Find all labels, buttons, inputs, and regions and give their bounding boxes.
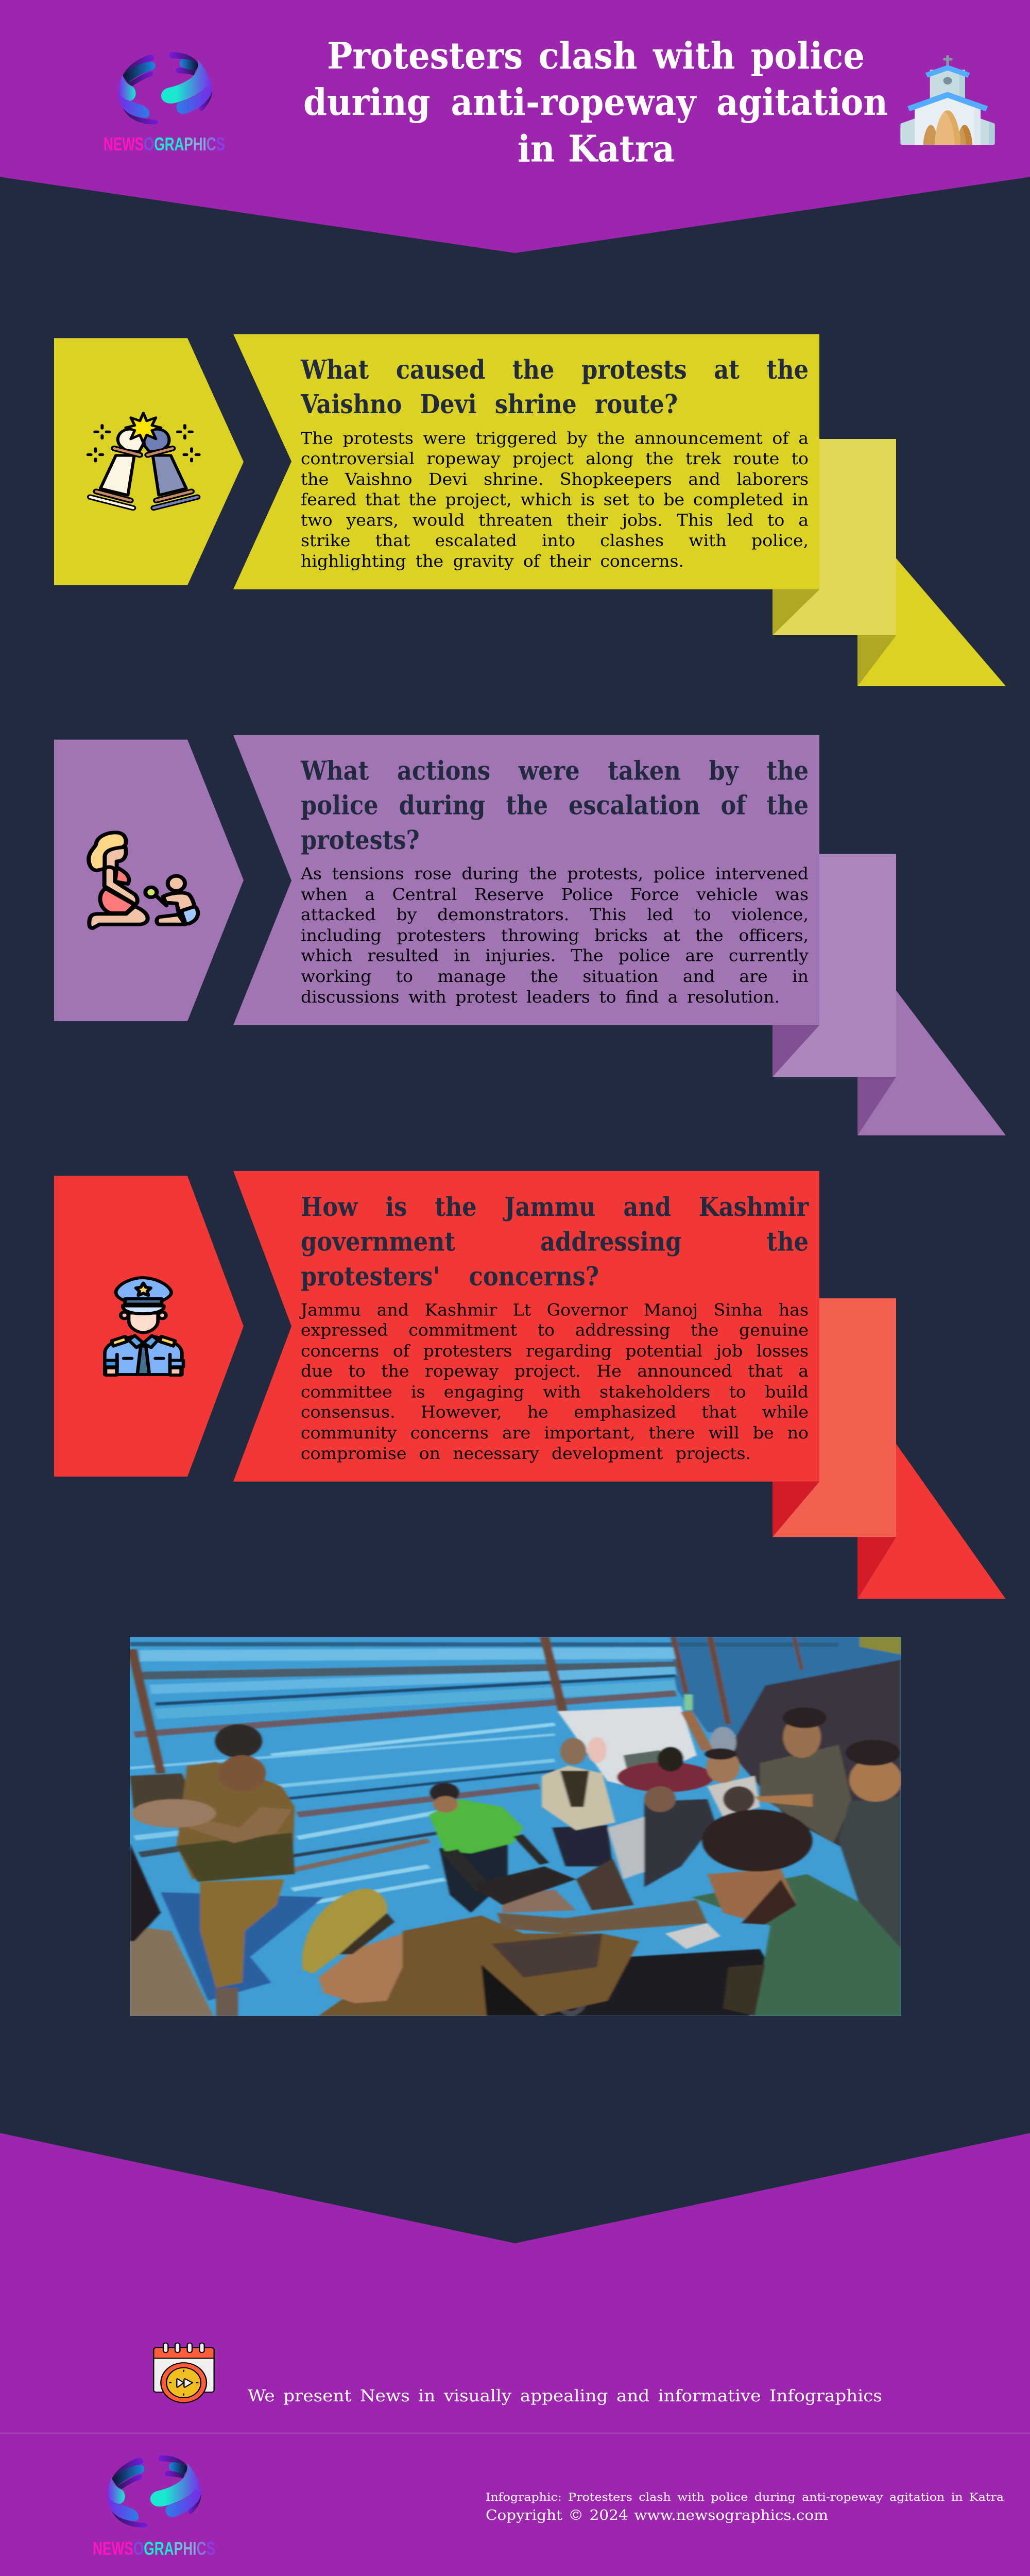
text banner — [233, 735, 819, 1025]
body text: compromise on necessary development projects. — [301, 1445, 751, 1463]
body text — [301, 865, 809, 1006]
front man — [692, 1874, 901, 2016]
old man — [552, 1825, 613, 1867]
green shirt man — [439, 1843, 508, 1913]
icon: mother and child — [89, 833, 198, 928]
heading: What caused the protests at the — [301, 354, 809, 385]
heading: What actions were taken by the — [301, 755, 809, 786]
body text: when a Central Reserve Police Force vehicle was — [301, 885, 809, 904]
body text: controversial ropeway project along the trek route to — [301, 450, 809, 468]
body text: working to manage the situation and are in — [301, 968, 809, 986]
body text: Jammu and Kashmir Lt Governor Manoj Sinha has — [301, 1301, 809, 1319]
heading: police during the escalation of the — [301, 790, 809, 821]
card tail — [857, 558, 1006, 686]
footer credit text — [486, 2490, 1004, 2523]
body text: which resulted in injuries. The police are currently — [301, 947, 809, 965]
panel: card 1 protests cause — [54, 334, 1006, 686]
heading: Vaishno Devi shrine route? — [301, 389, 678, 419]
sign — [558, 1706, 697, 1786]
body text: highlighting the gravity of their concerns. — [301, 552, 684, 571]
panel: card 2 police actions — [54, 735, 1006, 1136]
title: Protesters clash with police — [327, 35, 865, 77]
body text: attacked by demonstrators. This led to violence, — [301, 906, 809, 924]
card fold — [772, 439, 896, 635]
icon: calendar with fast-forward clock — [153, 2342, 215, 2403]
title: in Katra — [518, 128, 675, 171]
heading: How is the Jammu and Kashmir — [301, 1192, 809, 1223]
photo: clash between police and protesters — [130, 1637, 901, 2016]
heading: protests? — [301, 825, 420, 855]
heading: government addressing the — [301, 1226, 809, 1257]
body text: The protests were triggered by the announcement of a — [301, 429, 809, 448]
panel: card 3 government response — [54, 1171, 1006, 1599]
icon tab — [54, 1176, 244, 1477]
body text: concerns of protesters regarding potential job losses — [301, 1342, 809, 1360]
text banner — [233, 1171, 819, 1482]
footer divider — [0, 2432, 1030, 2434]
logo: Newsographics header — [104, 53, 225, 150]
body text: discussions with protest leaders to find a resolution. — [301, 988, 780, 1006]
body text: As tensions rose during the protests, police intervened — [301, 865, 809, 883]
body text: the Vaishno Devi shrine. Shopkeepers and laborers — [301, 470, 809, 489]
footer banner — [0, 2133, 1030, 2576]
icon: chess pawns clash — [88, 413, 199, 508]
infographic title credit: Infographic: Protesters clash with police during anti-ropeway agitation in Katra — [486, 2490, 1004, 2503]
center dark man — [644, 1799, 715, 1887]
icon tab — [54, 338, 244, 585]
logo: Newsographics footer — [93, 2455, 215, 2555]
copyright: Copyright © 2024 www.newsographics.com — [486, 2507, 828, 2523]
body text: consensus. However, he emphasized that while — [301, 1403, 809, 1422]
card tail — [857, 1444, 1006, 1599]
icon tab — [54, 740, 244, 1021]
body text: committee is engaging with stakeholders to build — [301, 1383, 809, 1401]
heading — [301, 354, 809, 419]
body text: two years, would threaten their jobs. This led to a — [301, 512, 809, 530]
card fold — [772, 1298, 896, 1537]
icon: police officer — [105, 1278, 183, 1375]
police bottom — [318, 1916, 639, 2016]
police left — [130, 1773, 192, 1817]
card fold — [772, 854, 896, 1077]
body text: feared that the project, which is set to be completed in — [301, 491, 809, 510]
body text: strike that escalated into clashes with police, — [301, 532, 809, 550]
text banner — [233, 334, 819, 589]
body text: due to the ropeway project. He announced that a — [301, 1362, 809, 1381]
header banner — [0, 0, 1030, 253]
title: during anti-ropeway agitation — [303, 81, 888, 124]
body text: community concerns are important, there will be no — [301, 1424, 809, 1443]
heading — [301, 755, 809, 855]
tagline: We present News in visually appealing and informative Infographics — [248, 2387, 882, 2405]
body text: including protesters throwing bricks at the officers, — [301, 926, 809, 945]
title — [303, 35, 888, 171]
heading: protesters' concerns? — [301, 1261, 599, 1292]
body text — [301, 429, 809, 571]
heading — [301, 1192, 809, 1292]
crowd right — [728, 1659, 901, 1879]
body text — [299, 1301, 809, 1463]
icon: church — [900, 55, 995, 145]
card tail — [857, 990, 1006, 1136]
body text: expressed commitment to addressing the genuine — [301, 1321, 809, 1340]
bikes — [534, 1949, 770, 2016]
